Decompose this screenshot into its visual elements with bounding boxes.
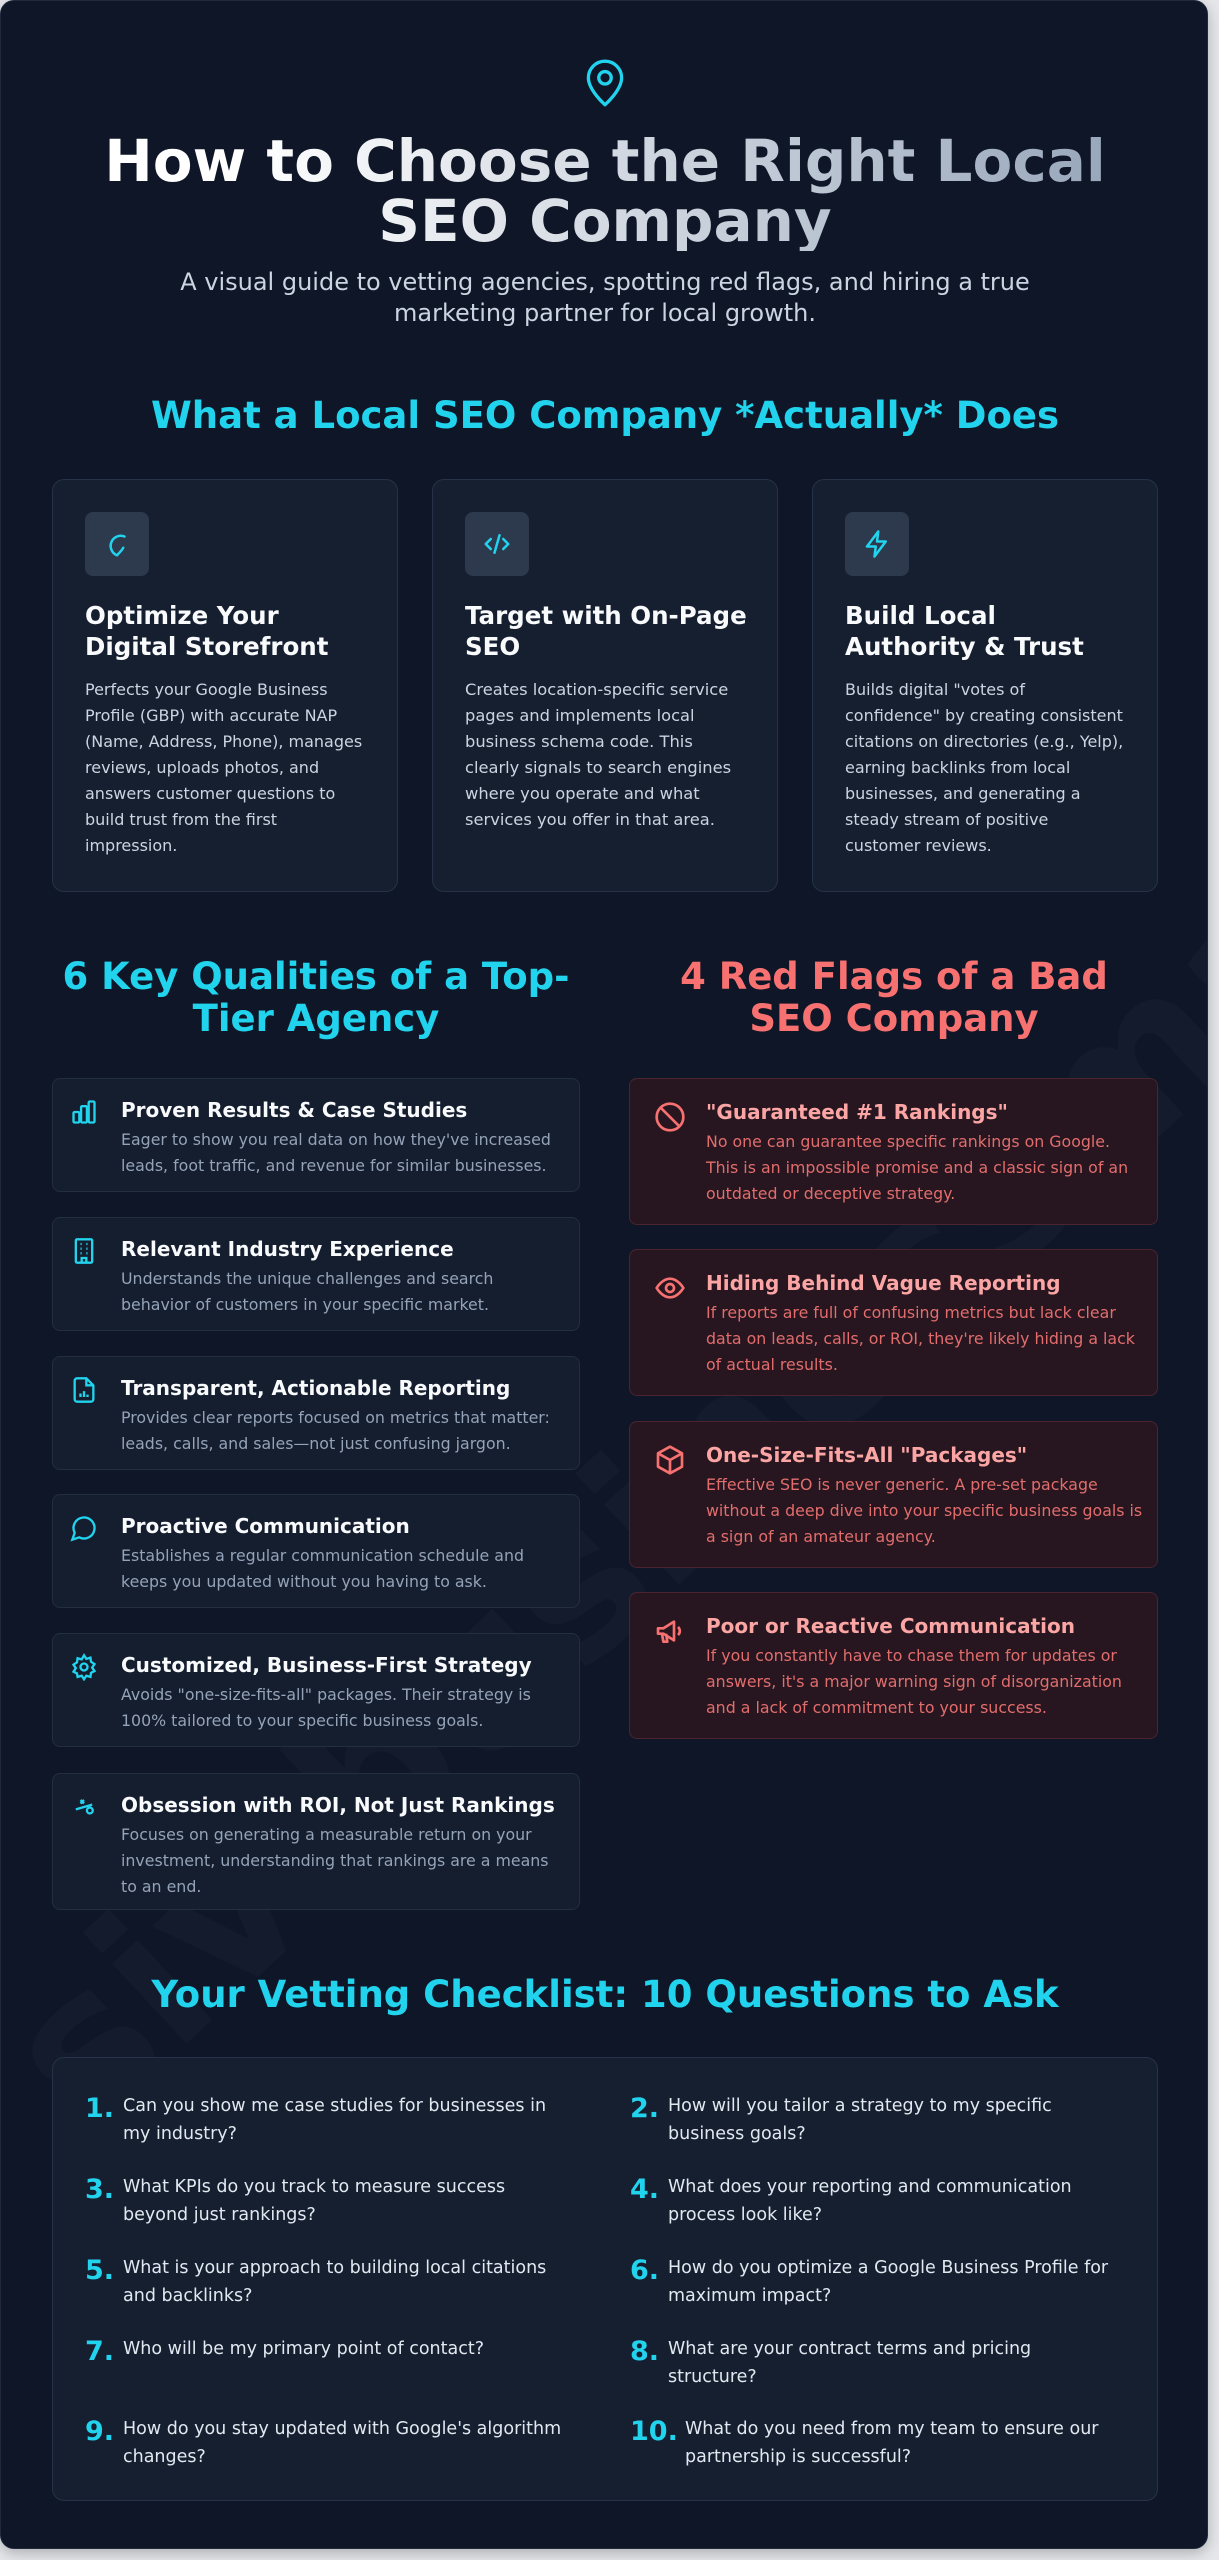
- quality: industry experience: Relevant Industry Experience: [121, 1237, 454, 1261]
- red flag: poor communication: [629, 1592, 1158, 1739]
- quality: roi: Focuses on generating a measurable return on your investment, understanding that rankings are a means to an end.: [121, 1825, 549, 1896]
- quality: proven results: Proven Results & Case Studies: [121, 1098, 467, 1122]
- panel: checklist: 8.: [630, 2336, 659, 2367]
- panel: checklist: 2.: [630, 2093, 659, 2124]
- icon: code: [465, 512, 529, 576]
- panel: on-page seo: Target with On-Page: [465, 601, 747, 630]
- panel: checklist: What are your contract terms and pricing structure?: [668, 2339, 1031, 2387]
- panel: local authority: citations on directories (e.g., Yelp),: [845, 732, 1123, 751]
- heading: 6 key qualities: 6 Key Qualities of a Top-: [62, 955, 570, 998]
- heading: 4 red flags: [680, 955, 1108, 1040]
- title: [1, 131, 1209, 251]
- quality: roi: [52, 1773, 580, 1910]
- quality: reporting: Transparent, Actionable Reporting: [121, 1376, 510, 1400]
- quality: customized strategy: [52, 1633, 580, 1747]
- panel: local authority: earning backlinks from local: [845, 758, 1070, 777]
- panel: on-page seo: [432, 479, 778, 892]
- quality: industry experience: Understands the unique challenges and search behavior of customers in your specific market.: [121, 1269, 493, 1314]
- panel: checklist: [52, 2057, 1158, 2501]
- panel: checklist: How do you stay updated with Google's algorithm changes?: [123, 2419, 561, 2467]
- quality: proven results: Eager to show you real data on how they've increased leads, foot traffic, and revenue for similar businesses.: [121, 1130, 551, 1175]
- quality: reporting: [52, 1356, 580, 1470]
- subtitle: A visual guide to vetting agencies, spotting red flags, and hiring a true marketing partner for local growth.: [180, 268, 1030, 327]
- panel: optimize storefront: Optimize Your: [85, 601, 279, 630]
- panel: checklist: What is your approach to building local citations and backlinks?: [123, 2258, 546, 2306]
- panel: local authority: Build Local: [845, 601, 996, 630]
- panel: checklist: What do you need from my team to ensure our partnership is successful?: [685, 2419, 1098, 2467]
- red flag: vague reporting: Hiding Behind Vague Reporting: [706, 1271, 1061, 1295]
- quality: communication: [52, 1494, 580, 1608]
- panel: checklist: What does your reporting and communication process look like?: [668, 2177, 1072, 2225]
- icon: map pin: [85, 512, 149, 576]
- red flag: vague reporting: [629, 1249, 1158, 1396]
- panel: local authority: businesses, and generating a: [845, 784, 1081, 803]
- quality: customized strategy: Avoids "one-size-fits-all" packages. Their strategy is 100% tailored to your specific business goals.: [121, 1685, 531, 1730]
- quality: reporting: Provides clear reports focused on metrics that matter: leads, calls, and sales—not just confusing jargon.: [121, 1408, 550, 1453]
- panel: checklist: What KPIs do you track to measure success beyond just rankings?: [123, 2177, 505, 2225]
- panel: on-page seo: SEO: [465, 632, 520, 661]
- panel: local authority: Authority & Trust: [845, 632, 1084, 661]
- panel: checklist: maximum impact?: [668, 2286, 831, 2306]
- heading: 6 key qualities: [62, 955, 570, 1040]
- red flag: guaranteed rankings: "Guaranteed #1 Rankings": [706, 1100, 1008, 1124]
- panel: on-page seo: Creates location-specific service pages and implements local business schema code. This clearly signals to search engines where you operate and what services you offer in that area.: [465, 680, 731, 829]
- heading: 4 red flags: 4 Red Flags of a Bad: [680, 955, 1108, 998]
- panel: checklist: 10.: [630, 2416, 678, 2447]
- red flag: guaranteed rankings: [629, 1078, 1158, 1225]
- panel: optimize storefront: Digital Storefront: [85, 632, 328, 661]
- panel: checklist: 7.: [85, 2336, 114, 2367]
- quality: roi: Obsession with ROI, Not Just Rankings: [121, 1793, 555, 1817]
- red flag: packages: [629, 1421, 1158, 1568]
- red flag: poor communication: If you constantly have to chase them for updates or answers, it's a major warning sign of disorganization and a lack of commitment to your success.: [706, 1646, 1122, 1717]
- red flag: poor communication: Poor or Reactive Communication: [706, 1614, 1075, 1638]
- heading: 6 key qualities: Tier Agency: [193, 997, 439, 1040]
- icon: location pin: [586, 60, 624, 106]
- quality: industry experience: [52, 1217, 580, 1331]
- panel: optimize storefront: [52, 479, 398, 892]
- panel: optimize storefront: Perfects your Google Business Profile (GBP) with accurate NAP (Name, Address, Phone), manages reviews, uploads photos, and answers customer questions to build trust from the first impression.: [85, 680, 362, 855]
- quality: proven results: [52, 1078, 580, 1192]
- panel: local authority: [812, 479, 1158, 892]
- panel: checklist: 1.: [85, 2093, 114, 2124]
- quality: communication: Establishes a regular communication schedule and keeps you updated without you having to ask.: [121, 1546, 524, 1591]
- panel: checklist: 4.: [630, 2174, 659, 2205]
- panel: checklist: 3.: [85, 2174, 114, 2205]
- panel: checklist: Can you show me case studies for businesses in my industry?: [123, 2096, 546, 2144]
- red flag: vague reporting: If reports are full of confusing metrics but lack clear data on leads, calls, or ROI, they're likely hiding a lack of actual results.: [706, 1303, 1135, 1374]
- panel: local authority: steady stream of positive: [845, 810, 1048, 829]
- quality: communication: Proactive Communication: [121, 1514, 410, 1538]
- panel: local authority: customer reviews.: [845, 836, 992, 855]
- title: How to Choose the Right Local: [104, 127, 1106, 195]
- heading: what a local seo company does: What a Local SEO Company *Actually* Does: [151, 394, 1059, 437]
- red flag: packages: One-Size-Fits-All "Packages": [706, 1443, 1027, 1467]
- icon: bolt: [845, 512, 909, 576]
- title: SEO Company: [378, 187, 832, 255]
- panel: checklist: How will you tailor a strategy to my specific business goals?: [668, 2096, 1052, 2144]
- quality: customized strategy: Customized, Business-First Strategy: [121, 1653, 532, 1677]
- heading: checklist: Your Vetting Checklist: 10 Questions to Ask: [151, 1973, 1059, 2016]
- panel: checklist: 9.: [85, 2416, 114, 2447]
- panel: checklist: 6.: [630, 2255, 659, 2286]
- panel: local authority: Builds digital "votes of: [845, 680, 1025, 699]
- panel: checklist: 5.: [85, 2255, 114, 2286]
- heading: 4 red flags: SEO Company: [749, 997, 1039, 1040]
- panel: local authority: confidence" by creating consistent: [845, 706, 1123, 725]
- panel: checklist: Who will be my primary point of contact?: [123, 2339, 484, 2359]
- red flag: guaranteed rankings: No one can guarantee specific rankings on Google. This is an impossible promise and a classic sign of an outdated or deceptive strategy.: [706, 1132, 1128, 1203]
- panel: checklist: How do you optimize a Google Business Profile for: [668, 2258, 1108, 2278]
- red flag: packages: Effective SEO is never generic. A pre-set package without a deep dive into your specific business goals is a sign of an amateur agency.: [706, 1475, 1142, 1546]
